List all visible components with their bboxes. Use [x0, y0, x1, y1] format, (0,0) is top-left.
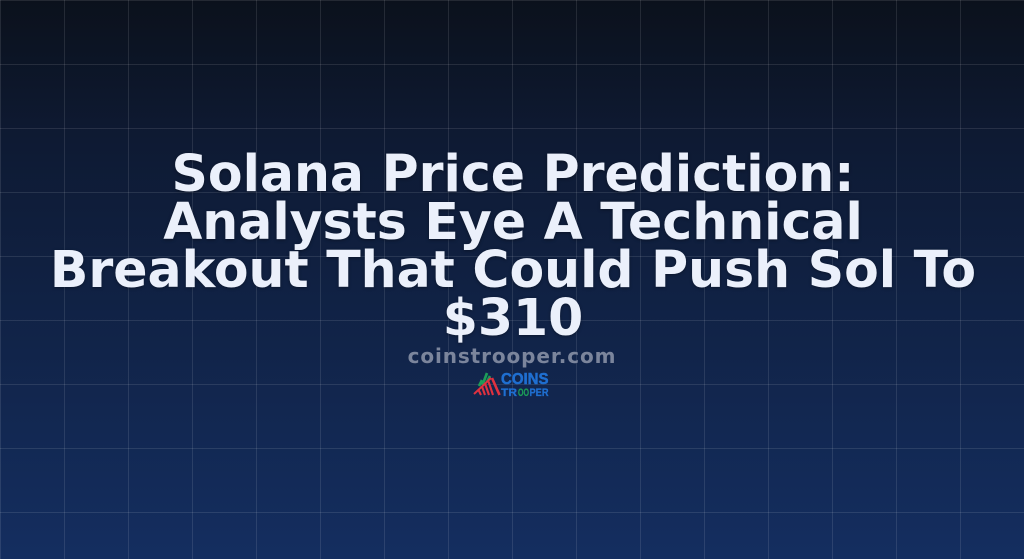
source domain: coinstrooper.com: [408, 344, 616, 368]
icon: green chart bars: [479, 373, 490, 386]
title: Analysts Eye A Technical: [163, 192, 863, 251]
logo wordmark: trooper: OO: [518, 387, 529, 399]
logo wordmark: trooper: PER: [530, 387, 549, 399]
icon: red chart bars: [474, 378, 500, 395]
title: Solana Price Prediction:: [172, 144, 854, 203]
logo wordmark: trooper: TR: [501, 387, 517, 399]
title: [50, 144, 976, 347]
title: Breakout That Could Push Sol To: [50, 240, 976, 299]
logo wordmark: coins: COINS: [501, 371, 548, 388]
title: $310: [443, 288, 583, 347]
logo: Coins Trooper: [473, 371, 549, 399]
